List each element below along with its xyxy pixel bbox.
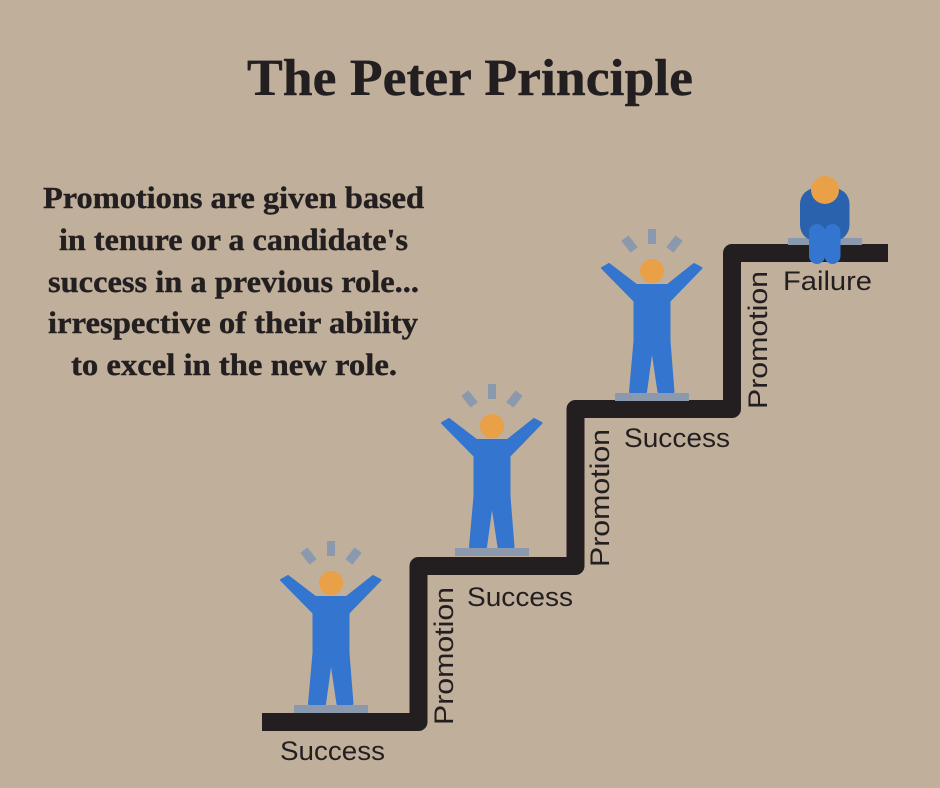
figure: celebrating person, step 1: [281, 541, 380, 713]
label: promotion 3: Promotion: [743, 271, 773, 409]
text block: definition: to excel in the new role.: [71, 347, 397, 382]
text block: definition: irrespective of their ability: [48, 305, 419, 340]
label: success 1: Success: [280, 736, 385, 766]
text block: definition: success in a previous role...: [48, 264, 419, 299]
figure: celebrating person, step 3: [602, 229, 702, 401]
label: success 3: Success: [624, 423, 730, 453]
label: promotion 2: Promotion: [585, 429, 615, 567]
text block: definition: [43, 180, 424, 382]
text block: definition: in tenure or a candidate's: [59, 222, 408, 257]
label: success 2: Success: [467, 582, 573, 612]
figure: celebrating person, step 2: [442, 384, 542, 556]
figure: slumped person, failure: [788, 176, 862, 264]
text block: definition: Promotions are given based: [43, 180, 424, 215]
staircase: [262, 253, 888, 722]
title: The Peter Principle: [247, 50, 693, 107]
label: failure: Failure: [783, 266, 872, 296]
label: promotion 1: Promotion: [429, 587, 459, 725]
